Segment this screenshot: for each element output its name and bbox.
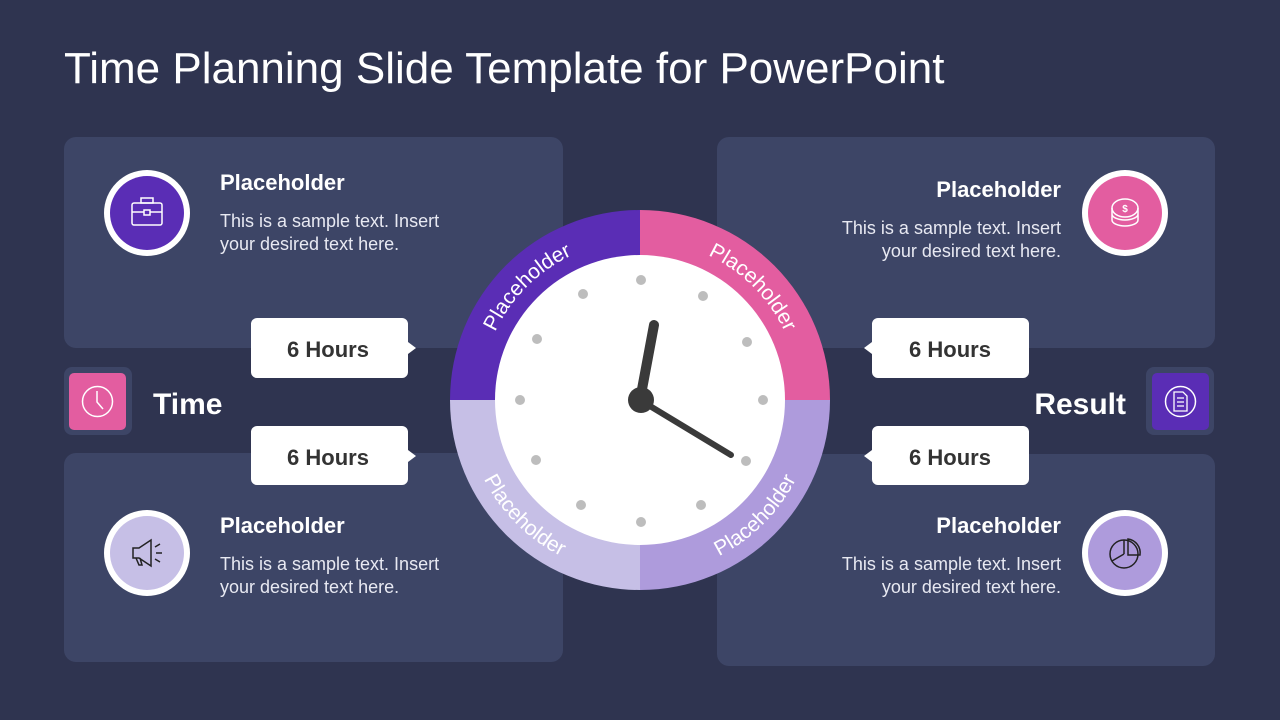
ring labels: Placeholder [710,243,795,329]
text: bottom-left: your desired text here. [220,577,399,597]
icon: time clock [64,367,132,435]
icon: pie chart [1082,510,1168,596]
ring labels [483,243,795,556]
text: bottom-left: This is a sample text. Insert [220,554,439,574]
callout: 6 hours bottom-left: 6 Hours [287,445,369,470]
callout: 6 hours bottom-right [864,426,1029,485]
text: bottom-right: This is a sample text. Insert [842,554,1061,574]
title: Time Planning Slide Template for PowerPoint [64,44,944,93]
hands [628,325,731,455]
icon: coins [1082,170,1168,256]
callout: 6 hours top-left: 6 Hours [287,337,369,362]
ring labels: Placeholder [483,245,569,330]
text: top-right: This is a sample text. Insert [842,218,1061,238]
text: top-right [842,177,1061,261]
hour dots [515,275,768,527]
text: top-left: This is a sample text. Insert [220,211,439,231]
callout: 6 hours top-left [251,318,416,378]
icon: briefcase [104,170,190,256]
icon: coins: $ [1122,204,1128,215]
callout: 6 hours bottom-right: 6 Hours [909,445,991,470]
ring labels: Placeholder [484,474,566,554]
panel: top-left [64,137,563,348]
text: top-right: Placeholder [936,177,1061,202]
panel: top-right [717,137,1215,348]
icon: result document [1146,367,1214,435]
ring segments [450,210,830,590]
panel: bottom-left [64,453,563,662]
icon: megaphone [104,510,190,596]
text: top-left: your desired text here. [220,234,399,254]
text: bottom-right: your desired text here. [882,577,1061,597]
label: Result: Result [1034,388,1126,421]
ring labels: Placeholder [714,474,794,556]
text: bottom-right [842,513,1061,597]
text: top-left [220,170,439,254]
clock face [495,255,785,545]
label: Time: Time [153,388,222,421]
text: bottom-left: Placeholder [220,513,345,538]
callout: 6 hours top-right [864,318,1029,378]
text: top-left: Placeholder [220,170,345,195]
callout: 6 hours top-right: 6 Hours [909,337,991,362]
text: bottom-right: Placeholder [936,513,1061,538]
callout: 6 hours bottom-left [251,426,416,485]
text: bottom-left [220,513,439,597]
clock [450,210,830,590]
text: top-right: your desired text here. [882,241,1061,261]
panel: bottom-right [717,454,1215,666]
